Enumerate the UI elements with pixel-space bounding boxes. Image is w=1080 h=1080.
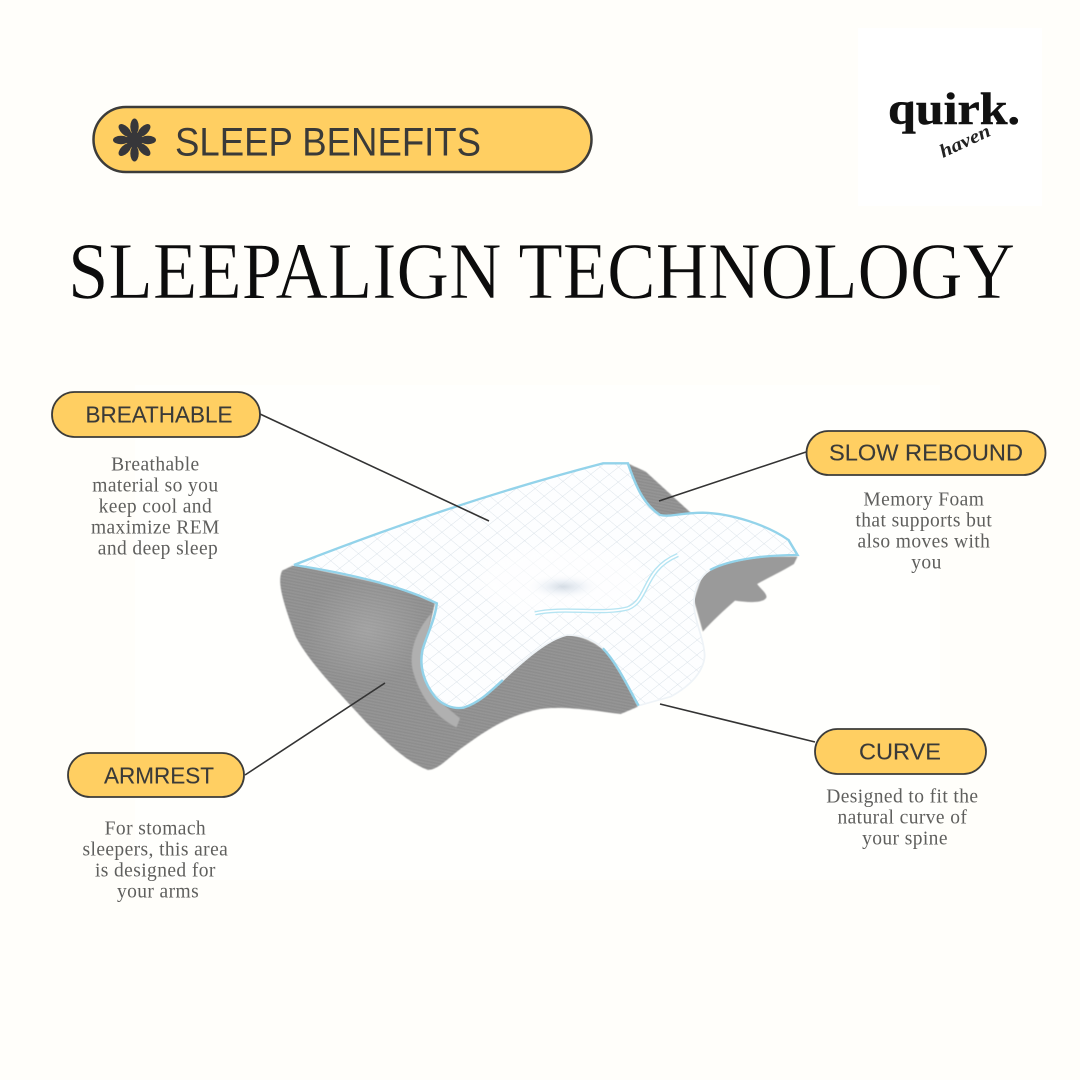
armrest description: sleepers, this area — [83, 840, 228, 860]
logo script: haven — [936, 121, 994, 163]
callout: slow rebound: SLOW REBOUND — [829, 440, 1023, 466]
slow rebound description: also moves with — [857, 532, 990, 552]
callout: armrest — [68, 753, 244, 902]
slow rebound description: Memory Foam — [863, 490, 984, 510]
callout: breathable — [52, 392, 260, 560]
breathable description: and deep sleep — [98, 538, 218, 560]
breathable description: material so you — [92, 476, 218, 496]
callout: curve: CURVE — [859, 738, 941, 764]
armrest description: is designed for — [95, 860, 216, 882]
pillow fold flap — [412, 613, 460, 727]
title: SLEEPALIGN TECHNOLOGY — [68, 228, 1015, 316]
pillow grey side: front mesh — [280, 565, 638, 770]
pillow blue piping — [294, 463, 797, 708]
pillow mesh highlight — [306, 577, 428, 683]
slow rebound description: that supports but — [855, 510, 992, 532]
curve description: Designed to fit the — [826, 786, 978, 808]
callout: curve — [815, 729, 986, 850]
curve description: your spine — [862, 828, 948, 850]
pillow quilted top — [294, 463, 797, 708]
callout: slow rebound — [806, 431, 1046, 574]
pillow wave seam — [535, 555, 678, 613]
curve description: natural curve of — [837, 808, 967, 828]
logo: quirk haven: quirk. — [888, 84, 1020, 134]
breathable description: Breathable — [111, 454, 200, 476]
callout: breathable: BREATHABLE — [86, 402, 232, 428]
armrest description: For stomach — [105, 818, 206, 840]
callout: leader lines — [245, 414, 815, 775]
logo: quirk haven — [888, 84, 1020, 163]
breathable description: keep cool and — [99, 496, 212, 518]
icon: flower asterisk — [113, 118, 156, 162]
callout: armrest: ARMREST — [104, 762, 214, 788]
pillow centre dimple — [481, 547, 646, 613]
illustration: contour pillow — [280, 463, 797, 770]
armrest description: your arms — [117, 882, 199, 902]
pillow grey side: back right — [628, 463, 692, 517]
badge text: SLEEP BENEFITS — [175, 120, 481, 164]
pillow grey side: right wing — [694, 557, 797, 632]
breathable description: maximize REM — [91, 518, 220, 538]
slow rebound description: you — [911, 552, 942, 574]
badge: sleep benefits — [94, 107, 592, 172]
